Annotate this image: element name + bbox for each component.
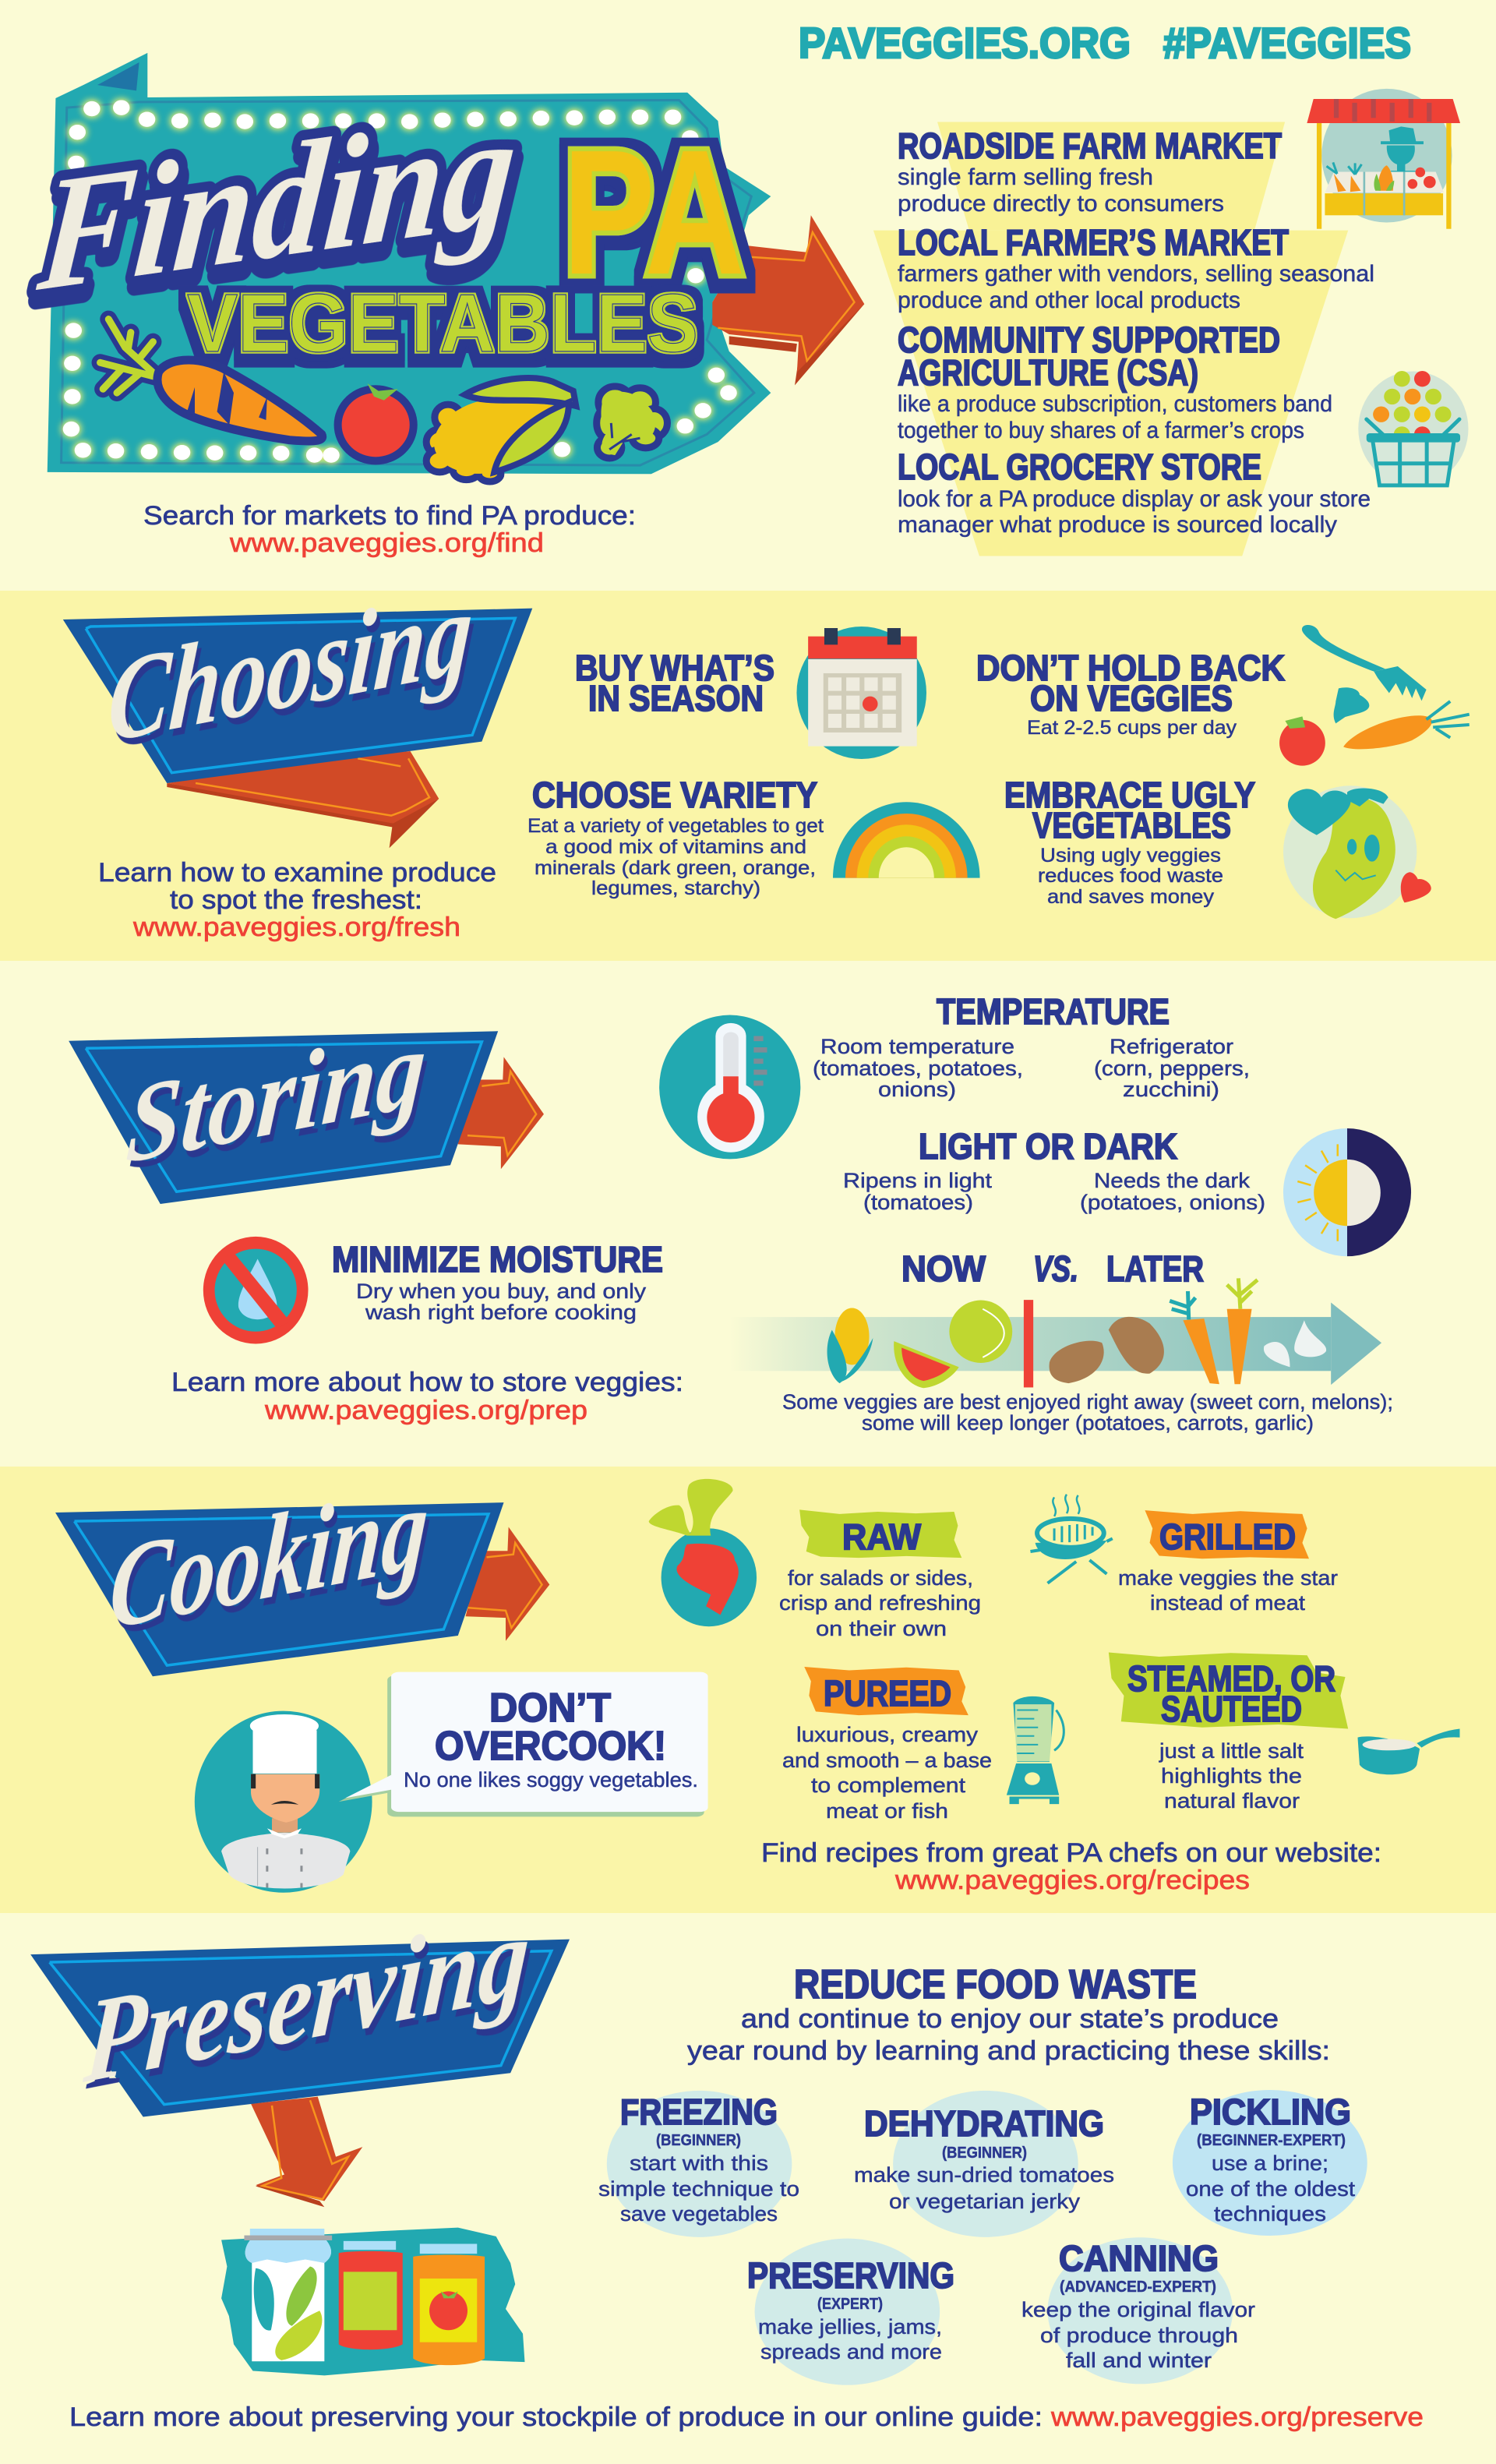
text: embrace ugly vegetables: Using ugly veggies (1040, 845, 1221, 867)
text: find recipes (761, 1838, 1381, 1895)
text: reduce food waste: and continue to enjoy our state’s produce (741, 2004, 1279, 2034)
skill: pickling: one of the oldest (1186, 2177, 1356, 2201)
text: community supported agriculture: COMMUNITY SUPPORTED (898, 319, 1280, 360)
callout: don't overcook: OVERCOOK! (435, 1724, 666, 1769)
label: pureed: PUREED (824, 1673, 951, 1714)
text: light or dark (843, 1126, 1265, 1214)
skill: pickling: PICKLING (1190, 2092, 1351, 2132)
text: local farmer's market: farmers gather with vendors, selling seasonal (898, 261, 1374, 287)
jar: red (339, 2241, 403, 2349)
icon: rainbow (833, 802, 980, 878)
heading: now vs. later (901, 1248, 1204, 1289)
text: now vs later caption: Some veggies are best enjoyed right away (sweet corn, melons); (782, 1390, 1393, 1414)
skill: pickling: techniques (1214, 2202, 1326, 2226)
text: minimize moisture (332, 1239, 663, 1324)
sign: cooking (55, 1460, 504, 1676)
skill: preserving: make jellies, jams, (758, 2315, 942, 2339)
text: pureed description: meat or fish (826, 1799, 948, 1823)
website and hashtag header: #PAVEGGIES (1163, 19, 1411, 67)
text: light or dark: (tomatoes) (863, 1191, 973, 1214)
heading: now vs. later: LATER (1106, 1248, 1204, 1289)
text: reduce food waste: REDUCE FOOD WASTE (794, 1962, 1197, 2007)
skill: preserving: PRESERVING (747, 2255, 954, 2296)
label: steamed or sauteed: STEAMED, OR (1127, 1658, 1335, 1699)
skill: canning: CANNING (1059, 2238, 1219, 2279)
text: grilled description: instead of meat (1150, 1591, 1306, 1615)
text: choose variety (527, 775, 824, 899)
text: roadside farm market: single farm selling fresh (898, 164, 1153, 190)
text: local farmer's market: LOCAL FARMER’S MARKET (898, 222, 1289, 263)
skill: dehydrating: DEHYDRATING (864, 2103, 1104, 2144)
text: light or dark: Needs the dark (1094, 1169, 1251, 1192)
icon: beet (649, 1479, 757, 1626)
text: community supported agriculture: like a produce subscription, customers band (898, 391, 1332, 417)
text: minimize moisture: wash right before cooking (365, 1301, 637, 1324)
sign title: Storing (123, 1004, 430, 1187)
icon: thermometer (659, 1015, 800, 1159)
skill: dehydrating: make sun-dried tomatoes (854, 2163, 1114, 2187)
text: roadside farm market (898, 125, 1282, 217)
label: steamed or sauteed (1109, 1652, 1348, 1729)
neon arrow: pointing down (251, 2097, 362, 2207)
jar: tomato (413, 2243, 485, 2365)
text: embrace ugly vegetables: reduces food waste (1038, 865, 1223, 887)
text: steamed description: natural flavor (1164, 1789, 1300, 1813)
icon: grill (1030, 1495, 1113, 1583)
skill: freezing: start with this (630, 2152, 768, 2175)
text: pureed description: to complement (811, 1774, 966, 1797)
label: raw: RAW (842, 1516, 922, 1557)
text: embrace ugly vegetables (1004, 775, 1255, 908)
text: temperature: (tomatoes, potatoes, (813, 1057, 1023, 1080)
text: embrace ugly vegetables: and saves money (1047, 886, 1215, 908)
skill: canning: keep the original flavor (1021, 2298, 1255, 2321)
text: local farmer's market (898, 222, 1374, 313)
text: temperature: Room temperature (820, 1035, 1014, 1058)
skill: pickling: use a brine; (1212, 2152, 1328, 2175)
icon: melon (894, 1341, 959, 1388)
website and hashtag header: PAVEGGIES.ORG (799, 19, 1131, 67)
text: now vs later caption: some will keep longer (potatoes, carrots, garlic) (862, 1411, 1314, 1435)
icon: carrots (1170, 1278, 1258, 1384)
text: local grocery store: manager what produce is sourced locally (898, 512, 1337, 538)
skill: pickling (1186, 2092, 1356, 2226)
skill: freezing: FREEZING (620, 2092, 778, 2132)
callout: don't overcook: DON’T (489, 1686, 611, 1731)
text: choose variety: a good mix of vitamins and (545, 836, 806, 858)
panel: preserving (0, 1889, 1496, 2464)
skill: dehydrating: (BEGINNER) (942, 2145, 1027, 2162)
sign: storing (69, 1004, 498, 1204)
skill: canning (1021, 2238, 1255, 2372)
neon arrow: pointing down-right (167, 751, 439, 848)
text: don't hold back on veggies: DON’T HOLD BACK (976, 648, 1285, 688)
panel: choosing (0, 564, 1496, 961)
skill: preserving (747, 2255, 954, 2363)
yellow funnel background (873, 122, 1348, 556)
jar: pickles (244, 2229, 332, 2361)
sign: preserving (30, 1889, 570, 2116)
text: local grocery store: LOCAL GROCERY STORE (898, 447, 1261, 487)
text: temperature: zucchini) (1123, 1078, 1219, 1101)
text: choose variety: Eat a variety of vegetables to get (527, 815, 824, 837)
text: temperature: TEMPERATURE (937, 991, 1170, 1032)
text: buy what's in season: BUY WHAT’S (575, 648, 774, 688)
text: grilled description: make veggies the star (1118, 1566, 1338, 1590)
website and hashtag header (799, 19, 1411, 67)
text: don't hold back on veggies: Eat 2-2.5 cups per day (1027, 717, 1237, 739)
icon: pot (1357, 1729, 1459, 1774)
icon: cabbage (949, 1301, 1012, 1363)
text: buy what's in season (575, 648, 774, 718)
text: learn more about storing (171, 1368, 683, 1425)
skill: preserving: (EXPERT) (817, 2296, 883, 2313)
icon: jars (221, 2228, 524, 2375)
text: buy what's in season: IN SEASON (588, 678, 764, 718)
text: local grocery store: look for a PA produce display or ask your store (898, 486, 1371, 512)
icon: carrot, tomato, corn, broccoli (101, 319, 667, 482)
text: find recipes: Find recipes from great PA chefs on our website: (761, 1838, 1381, 1868)
panel: finding vegetables (0, 0, 1496, 591)
panel: storing (0, 961, 1496, 1467)
skill: freezing (598, 2092, 799, 2226)
icon: no water (203, 1237, 309, 1343)
text: temperature: onions) (878, 1078, 956, 1101)
skill: preserving: spreads and more (760, 2340, 942, 2363)
icon: calendar (796, 627, 926, 759)
skill: canning: of produce through (1040, 2324, 1238, 2347)
text: don't hold back on veggies: ON VEGGIES (1030, 678, 1233, 718)
skill: freezing: save vegetables (620, 2202, 778, 2226)
icon: chef (195, 1711, 372, 1893)
text: choose variety: legumes, starchy) (591, 877, 760, 899)
icon: market stand (1307, 89, 1460, 229)
text: reduce food waste (687, 1962, 1330, 2066)
neon arrow: pointing right (466, 1527, 549, 1641)
neon arrow: pointing right (458, 1057, 544, 1169)
text: pureed description (782, 1723, 992, 1823)
text: steamed description: highlights the (1161, 1764, 1302, 1788)
text: choose variety: minerals (dark green, orange, (535, 857, 816, 879)
skill: canning: (ADVANCED-EXPERT) (1060, 2279, 1216, 2296)
text: raw description (779, 1566, 981, 1640)
text: find recipes: www.paveggies.org/recipes (894, 1866, 1250, 1895)
text: steamed description: just a little salt (1159, 1739, 1304, 1763)
text: temperature: (corn, peppers, (1094, 1057, 1250, 1080)
sign: choosing (63, 564, 532, 783)
text: raw description: on their own (816, 1617, 947, 1640)
text: choose variety: CHOOSE VARIETY (532, 775, 817, 815)
callout: don't overcook (339, 1672, 708, 1816)
text: light or dark: LIGHT OR DARK (919, 1126, 1177, 1167)
text: search for markets: www.paveggies.org/find (229, 528, 544, 558)
text: local farmer's market: produce and other local products (898, 288, 1240, 313)
icon: ugly vegetable with hearts (1283, 785, 1431, 919)
label: raw (799, 1509, 961, 1558)
heading: now vs. later: NOW (901, 1248, 986, 1289)
neon arrow: pointing right (712, 215, 864, 385)
text: learn how to examine produce: to spot the freshest: (170, 885, 422, 915)
text: temperature: Refrigerator (1110, 1035, 1233, 1058)
text: community supported agriculture: AGRICULTURE (CSA) (898, 352, 1198, 393)
skill: pickling: (BEGINNER-EXPERT) (1197, 2132, 1346, 2149)
text: learn more about preserving (69, 2402, 1424, 2432)
text: temperature (813, 991, 1250, 1101)
text: grilled description (1118, 1566, 1338, 1615)
title: Vegetables: VEGETABLES (187, 277, 698, 369)
icon: sun and moon (1283, 1128, 1411, 1256)
text: steamed description (1159, 1739, 1304, 1813)
text: learn more about storing: Learn more about how to store veggies: (171, 1368, 683, 1397)
sign title: Preserving (80, 1889, 534, 2109)
text: local grocery store (898, 447, 1371, 538)
icon: corn (827, 1308, 873, 1383)
skill: freezing: simple technique to (598, 2177, 799, 2201)
blob backgrounds (607, 2090, 1367, 2385)
icon: blender (1007, 1696, 1064, 1804)
text: learn more about preserving: Learn more about preserving your stockpile of produce in our online guide: (69, 2402, 1043, 2432)
title: Finding: Finding (32, 78, 523, 326)
text: now vs later caption (782, 1390, 1393, 1435)
text: raw description: for salads or sides, (788, 1566, 973, 1590)
label: grilled: GRILLED (1159, 1516, 1296, 1557)
text: learn how to examine produce: www.paveggies.org/fresh (132, 913, 460, 942)
text: learn how to examine produce (98, 858, 496, 942)
callout: don't overcook: No one likes soggy vegetables. (404, 1768, 698, 1792)
text: learn how to examine produce: Learn how to examine produce (98, 858, 496, 888)
Pennsylvania sign with title (32, 53, 864, 558)
text: learn more about storing: www.paveggies.org/prep (264, 1396, 587, 1425)
text: light or dark: Ripens in light (843, 1169, 993, 1192)
sign title: Choosing (104, 564, 477, 768)
sign title: Cooking (106, 1460, 432, 1655)
text: community supported agriculture: together to buy shares of a farmer’s crops (898, 418, 1304, 443)
icon: produce basket (1358, 371, 1468, 486)
text: minimize moisture: MINIMIZE MOISTURE (332, 1239, 663, 1280)
text: search for markets: Search for markets to find PA produce: (143, 501, 636, 531)
text: embrace ugly vegetables: EMBRACE UGLY (1004, 775, 1255, 815)
text: pureed description: and smooth – a base (782, 1749, 992, 1772)
text: roadside farm market: ROADSIDE FARM MARKET (898, 125, 1282, 166)
icon: garlic (1264, 1320, 1326, 1367)
text: light or dark: (potatoes, onions) (1080, 1191, 1265, 1214)
text: roadside farm market: produce directly to consumers (898, 191, 1224, 217)
panel: cooking (0, 1460, 1496, 1913)
skill: freezing: (BEGINNER) (656, 2132, 741, 2149)
text: minimize moisture: Dry when you buy, and only (356, 1280, 647, 1303)
chart: now vs later timeline (730, 1278, 1381, 1388)
text: community supported agriculture (898, 319, 1332, 443)
label: steamed or sauteed: SAUTEED (1161, 1689, 1302, 1729)
text: pureed description: luxurious, creamy (796, 1723, 979, 1746)
text: raw description: crisp and refreshing (779, 1591, 981, 1615)
text: don't hold back on veggies (976, 648, 1285, 739)
text: reduce food waste: year round by learning and practicing these skills: (687, 2036, 1330, 2066)
title: PA: PA (563, 114, 745, 312)
skill: canning: fall and winter (1066, 2349, 1212, 2372)
icon: potatoes (1050, 1317, 1164, 1383)
text: embrace ugly vegetables: VEGETABLES (1032, 805, 1231, 845)
text: learn more about preserving: www.paveggies.org/preserve (1050, 2402, 1424, 2432)
skill: dehydrating: or vegetarian jerky (889, 2190, 1081, 2213)
text: search for markets (143, 501, 636, 558)
heading: now vs. later: VS. (1033, 1248, 1078, 1289)
icon: fork and vegetables (1279, 625, 1470, 766)
skill: dehydrating (854, 2103, 1114, 2213)
